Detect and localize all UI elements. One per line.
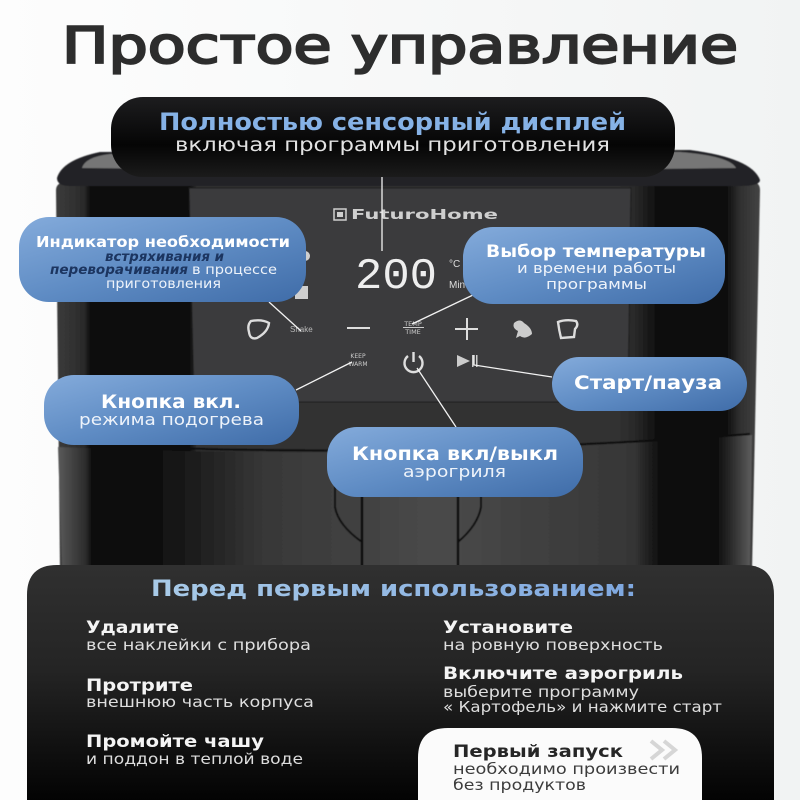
temperature text line 2: программы — [546, 277, 647, 293]
callout: shake indicator — [19, 217, 306, 302]
appliance body — [56, 180, 760, 570]
step: switch on — [443, 664, 722, 716]
keep warm heading: Кнопка вкл. — [101, 391, 241, 413]
power text: аэрогриля — [403, 462, 506, 481]
step: install — [443, 618, 663, 654]
keep warm label: KEEP — [350, 353, 366, 360]
callout subtext: включая программы приготовления — [175, 134, 610, 156]
step: install: на ровную поверхность — [443, 636, 663, 654]
step: install: Установите — [443, 618, 573, 637]
step: switch on: Включите аэрогриль — [443, 664, 683, 683]
callout: keep warm — [44, 375, 299, 445]
unit celsius: °C — [449, 259, 460, 270]
step: wipe: Протрите — [86, 676, 193, 695]
connector lines — [269, 177, 552, 427]
brand logo — [334, 208, 498, 223]
icon: broccoli — [514, 320, 532, 338]
temperature text line 1: и времени работы — [517, 261, 676, 277]
callout: touch display — [111, 97, 675, 177]
lid button — [82, 152, 736, 170]
shake text line 2: в процессе — [192, 263, 277, 278]
start pause heading: Старт/пауза — [574, 372, 722, 394]
step: remove stickers: все наклейки с прибора — [86, 636, 311, 654]
unit minutes: Min — [449, 280, 465, 291]
callout: temperature — [463, 227, 725, 304]
shake text line 3: приготовления — [106, 277, 221, 292]
callout heading: Полностью сенсорный дисплей — [159, 108, 626, 136]
temp time button — [403, 320, 424, 336]
control panel — [189, 188, 631, 402]
card: first launch — [418, 728, 702, 800]
keep warm label — [348, 353, 368, 368]
step: remove stickers: Удалите — [86, 618, 179, 637]
food icons top left — [295, 251, 310, 299]
keep warm text: режима подогрева — [79, 410, 264, 429]
temperature display: 200 — [355, 252, 437, 302]
step: wash bowl — [86, 732, 303, 768]
step: switch on: выберите программу — [443, 683, 639, 701]
panel: before first use — [27, 565, 774, 800]
callout: power — [327, 427, 583, 497]
basket — [58, 435, 752, 570]
handle — [335, 480, 481, 570]
keep warm label: WARM — [348, 361, 368, 368]
shake emphasised line 2: переворачивания — [50, 263, 188, 278]
icon: fish program — [248, 320, 269, 338]
icon: minus — [347, 327, 370, 329]
step: remove stickers — [86, 618, 311, 654]
power heading: Кнопка вкл/выкл — [352, 443, 558, 465]
icon: play pause — [457, 355, 478, 367]
temperature heading: Выбор температуры — [486, 242, 706, 262]
appliance lid — [57, 150, 760, 186]
temp time button: TEMP — [403, 320, 422, 328]
shake heading: Индикатор необходимости — [36, 233, 290, 251]
air fryer appliance — [56, 150, 760, 570]
step: wipe: внешнюю часть корпуса — [86, 693, 314, 711]
step: wipe — [86, 676, 314, 711]
basket seam — [100, 434, 750, 450]
panel heading: Перед первым использованием: — [151, 577, 636, 602]
brand name: FuturoHome — [351, 208, 498, 223]
icon: chevrons — [651, 741, 675, 759]
icon: bread — [558, 320, 577, 338]
card heading: Первый запуск — [453, 742, 623, 761]
step: switch on: « Картофель» и нажмите старт — [443, 698, 722, 716]
title: Простое управление — [62, 17, 738, 75]
card text line 1: необходимо произвести — [453, 760, 680, 778]
shake label: Shake — [290, 325, 313, 334]
icon: brand mark — [334, 209, 346, 220]
callout: start pause — [552, 357, 747, 411]
step: wash bowl: и поддон в теплой воде — [86, 750, 303, 768]
step: wash bowl: Промойте чашу — [86, 732, 264, 751]
icon: power — [404, 352, 422, 372]
shake emphasised line 1: встряхивания и — [105, 250, 224, 265]
icon: plus — [455, 318, 478, 340]
temp time button: TIME — [404, 328, 421, 336]
card text line 2: без продуктов — [453, 776, 586, 794]
